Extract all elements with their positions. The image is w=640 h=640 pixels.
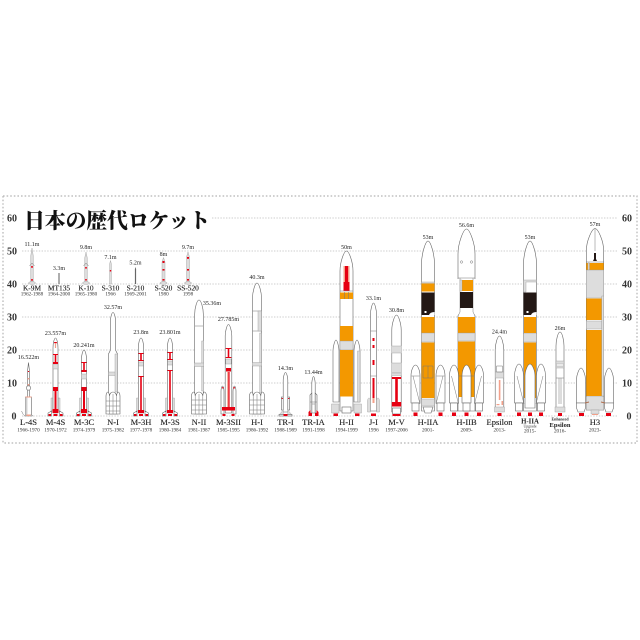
rocket: J-I: 33.1m — [366, 296, 381, 302]
rocket: S-210 — [124, 260, 147, 298]
rocket: K-9M: 11.1m — [25, 242, 40, 248]
rocket: M-V: 1997-2006 — [385, 428, 408, 434]
rocket: SS-520: 1998 — [183, 292, 194, 298]
left height axis: 60 — [7, 214, 17, 224]
rocket: M-3C — [73, 343, 96, 434]
rocket: M-3SII: 1985-1995 — [217, 428, 240, 434]
rocket: H-IIA: 53m — [423, 235, 434, 241]
rocket: M-3S: 23.801m — [159, 330, 181, 336]
rocket: S-520: 1980 — [158, 292, 169, 298]
rocket: H-IIA — [411, 235, 445, 434]
rocket: S-310: 7.1m — [104, 255, 117, 261]
rocket: H3: H3 — [590, 417, 600, 427]
rocket: N-II — [188, 300, 221, 434]
rocket: J-I — [366, 296, 381, 434]
rocket: K-9M — [21, 242, 44, 298]
rocket: Enhanced Epsilon: 2016- — [554, 428, 566, 434]
rocket: H-IIB: H-IIB — [456, 417, 477, 427]
left height axis: 30 — [7, 312, 17, 324]
rocket: M-3C: 1974-1979 — [73, 428, 96, 434]
rocket: S-210: 1969-2001 — [124, 292, 147, 298]
rocket: TR-IA: 13.44m — [304, 370, 323, 376]
rocket: N-I: 1975-1982 — [102, 428, 125, 434]
rocket: L-4S — [17, 355, 40, 434]
rocket: N-I: N-I — [107, 417, 119, 427]
rocket: N-II: N-II — [192, 417, 206, 427]
rocket: S-520: 8m — [160, 252, 168, 258]
rocket: S-520 — [155, 252, 173, 298]
rocket: TR-IA: 1991-1998 — [302, 428, 325, 434]
rocket: H-I — [246, 275, 269, 434]
rocket: TR-I — [274, 366, 297, 434]
rocket: M-4S: M-4S — [46, 417, 65, 427]
rocket: H-IIA Upgrade: Upgrade — [523, 424, 537, 428]
rocket: TR-IA — [302, 370, 326, 434]
rocket: H-IIA: 2001- — [422, 428, 434, 434]
rocket: Enhanced Epsilon: Epsilon — [550, 422, 571, 429]
rocket: H-IIA Upgrade: 2015- — [524, 428, 536, 434]
rocket: Enhanced Epsilon — [550, 326, 571, 434]
rocket: K-10: K-10 — [78, 284, 94, 292]
rocket: SS-520: 9.7m — [182, 245, 194, 251]
rocket: L-4S: 1966-1970 — [17, 428, 40, 434]
rocket: H-IIA Upgrade: H-IIA — [521, 418, 539, 426]
rocket: H3: 2023- — [589, 428, 601, 434]
rocket: M-3SII — [216, 317, 241, 434]
right height axis: 20 — [622, 346, 632, 356]
rocket: S-310: S-310 — [102, 284, 120, 292]
rocket: J-I: 1996 — [368, 428, 379, 434]
rocket: K-10 — [75, 245, 98, 298]
left height axis — [7, 214, 17, 422]
rocket: TR-I: TR-I — [277, 417, 294, 427]
rocket: H-IIB: 56.6m — [459, 223, 474, 229]
rocket: Epsilon — [487, 330, 513, 434]
rocket: M-3C: 20.241m — [73, 343, 95, 349]
rocket: MT135: 3.3m — [53, 266, 65, 272]
rocket: N-II: 1981-1987 — [188, 428, 211, 434]
rocket: M-3SII: M-3SII — [216, 417, 241, 427]
rocket: M-3S — [159, 330, 182, 434]
rocket: H-I: 40.3m — [249, 275, 265, 281]
rocket: J-I: J-I — [369, 417, 378, 427]
left height axis: 0 — [12, 412, 16, 422]
rocket: N-I: 32.57m — [104, 305, 122, 311]
right height axis: 30 — [622, 312, 632, 324]
rocket: K-10: 1965-1980 — [75, 292, 98, 298]
rocket: M-V: M-V — [388, 417, 406, 427]
rocket: K-9M: 1962-1988 — [21, 292, 44, 298]
rocket: SS-520: SS-520 — [177, 284, 199, 292]
rocket: M-3H: M-3H — [131, 417, 151, 427]
right height axis: 0 — [626, 412, 632, 422]
rocket: H-II: 1994-1999 — [335, 428, 358, 434]
rocket: K-9M: K-9M — [23, 284, 41, 292]
rocket: Enhanced Epsilon: Enhanced — [551, 416, 569, 422]
rocket: L-4S: L-4S — [20, 417, 37, 427]
rocket: SS-520 — [177, 245, 199, 298]
left height axis: 40 — [7, 280, 17, 290]
left height axis: 10 — [7, 378, 17, 390]
rocket: M-V: 30.8m — [389, 308, 404, 314]
rocket: M-3S: 1980-1984 — [159, 428, 182, 434]
rocket: H-IIA: H-IIA — [418, 417, 439, 427]
rocket: M-V — [385, 308, 408, 434]
rocket: S-520: S-520 — [155, 284, 173, 292]
rocket: H-IIA Upgrade — [514, 235, 546, 434]
right height axis: 40 — [622, 280, 632, 290]
rocket: M-3SII: 27.785m — [218, 317, 239, 323]
rocket: H-IIA Upgrade: 53m — [525, 235, 536, 241]
rocket: M-4S: 1970-1972 — [44, 428, 67, 434]
left height axis: 20 — [7, 346, 17, 356]
rocket: H-I: H-I — [251, 417, 263, 427]
rocket: H-II: H-II — [339, 417, 354, 427]
rocket: H-I: 1986-1992 — [246, 428, 269, 434]
rocket: N-I — [102, 305, 125, 434]
rocket: M-4S — [44, 331, 67, 434]
right height axis: 50 — [622, 246, 632, 258]
rocket: M-3C: M-3C — [74, 417, 94, 427]
left height axis: 50 — [7, 246, 17, 258]
rocket: N-II: 35.36m — [203, 301, 221, 307]
rocket: M-3H: 23.8m — [133, 330, 149, 336]
rocket: H-IIB: 2009- — [460, 428, 473, 434]
rocket: M-3S: M-3S — [160, 417, 180, 427]
title: 日本の歴代ロケット — [24, 205, 210, 235]
rocket: MT135: 1964-2000 — [48, 292, 71, 298]
rocket: Epsilon: Epsilon — [487, 417, 513, 427]
rocket: M-3H — [130, 330, 153, 434]
rocket: K-10: 9.8m — [80, 245, 92, 251]
rocket: L-4S: 16.522m — [18, 355, 39, 361]
rocket: H-IIB — [450, 223, 484, 434]
right height axis: 10 — [622, 378, 632, 390]
rocket: S-210: 5.2m — [129, 260, 142, 266]
rocket: TR-IA: TR-IA — [302, 417, 326, 427]
rocket: S-310 — [102, 255, 120, 298]
rocket: Enhanced Epsilon: 26m — [555, 326, 566, 332]
rocket: H3 — [576, 222, 614, 434]
right height axis — [622, 214, 632, 422]
rocket: H-II — [332, 245, 362, 434]
rocket: TR-I: 14.3m — [278, 366, 293, 372]
rocket: MT135 — [48, 266, 71, 298]
rocket: H-II: 50m — [341, 245, 352, 251]
rocket: M-3H: 1977-1978 — [130, 428, 153, 434]
rocket: S-310: 1966 — [105, 292, 116, 298]
rocket: M-4S: 23.557m — [45, 331, 66, 337]
rocket: TR-I: 1988-1989 — [274, 428, 297, 434]
rocket: MT135: MT135 — [48, 284, 70, 292]
rocket: Epsilon: 2013- — [493, 428, 506, 434]
right height axis: 60 — [622, 214, 632, 224]
rocket: H3: 57m — [590, 222, 601, 228]
rocket: Epsilon: 24.4m — [492, 330, 507, 336]
rocket: S-210: S-210 — [127, 284, 145, 292]
